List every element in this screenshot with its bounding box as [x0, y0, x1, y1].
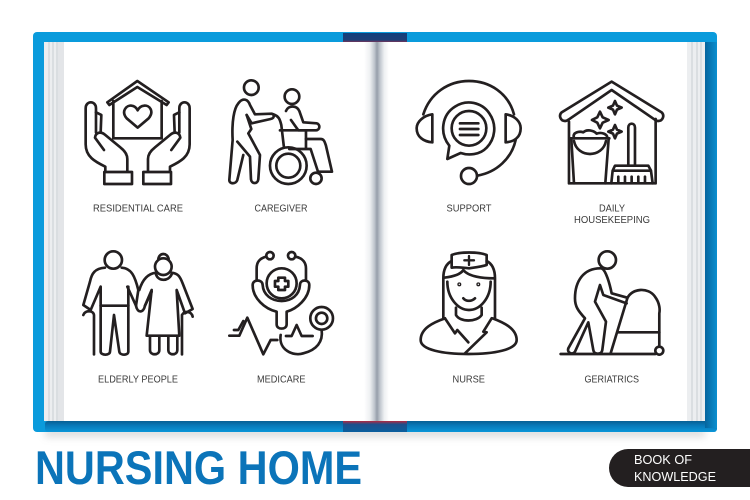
label: support: SUPPORT: [446, 204, 492, 214]
icon: support headset: [417, 81, 521, 184]
label: daily housekeeping: HOUSEKEEPING: [574, 215, 650, 226]
icon: elderly people: [83, 251, 193, 355]
label: elderly people: ELDERLY PEOPLE: [98, 374, 178, 386]
label: caregiver: CAREGIVER: [254, 204, 308, 214]
label: medicare: MEDICARE: [257, 374, 306, 386]
icon: daily housekeeping: [560, 82, 663, 183]
book cover: [33, 32, 717, 432]
label: daily housekeeping: DAILY: [599, 204, 625, 214]
left page: [44, 42, 377, 421]
label: daily housekeeping: [574, 204, 650, 226]
icon: caregiver: [229, 80, 332, 184]
icon: geriatrics: [561, 251, 663, 355]
badge: book of knowledge: [609, 449, 750, 487]
label: residential care: RESIDENTIAL CARE: [93, 204, 183, 214]
badge: book of knowledge: KNOWLEDGE: [634, 469, 716, 484]
icon: medicare stethoscope: [229, 252, 333, 354]
title: NURSING HOME: [35, 441, 362, 494]
right page: [377, 42, 705, 421]
book: [33, 32, 717, 437]
label: geriatrics: GERIATRICS: [584, 374, 639, 386]
badge: book of knowledge: BOOK OF: [634, 452, 692, 467]
icon: residential care: [86, 81, 190, 184]
icon: nurse: [421, 252, 517, 354]
label: nurse: NURSE: [452, 374, 485, 386]
